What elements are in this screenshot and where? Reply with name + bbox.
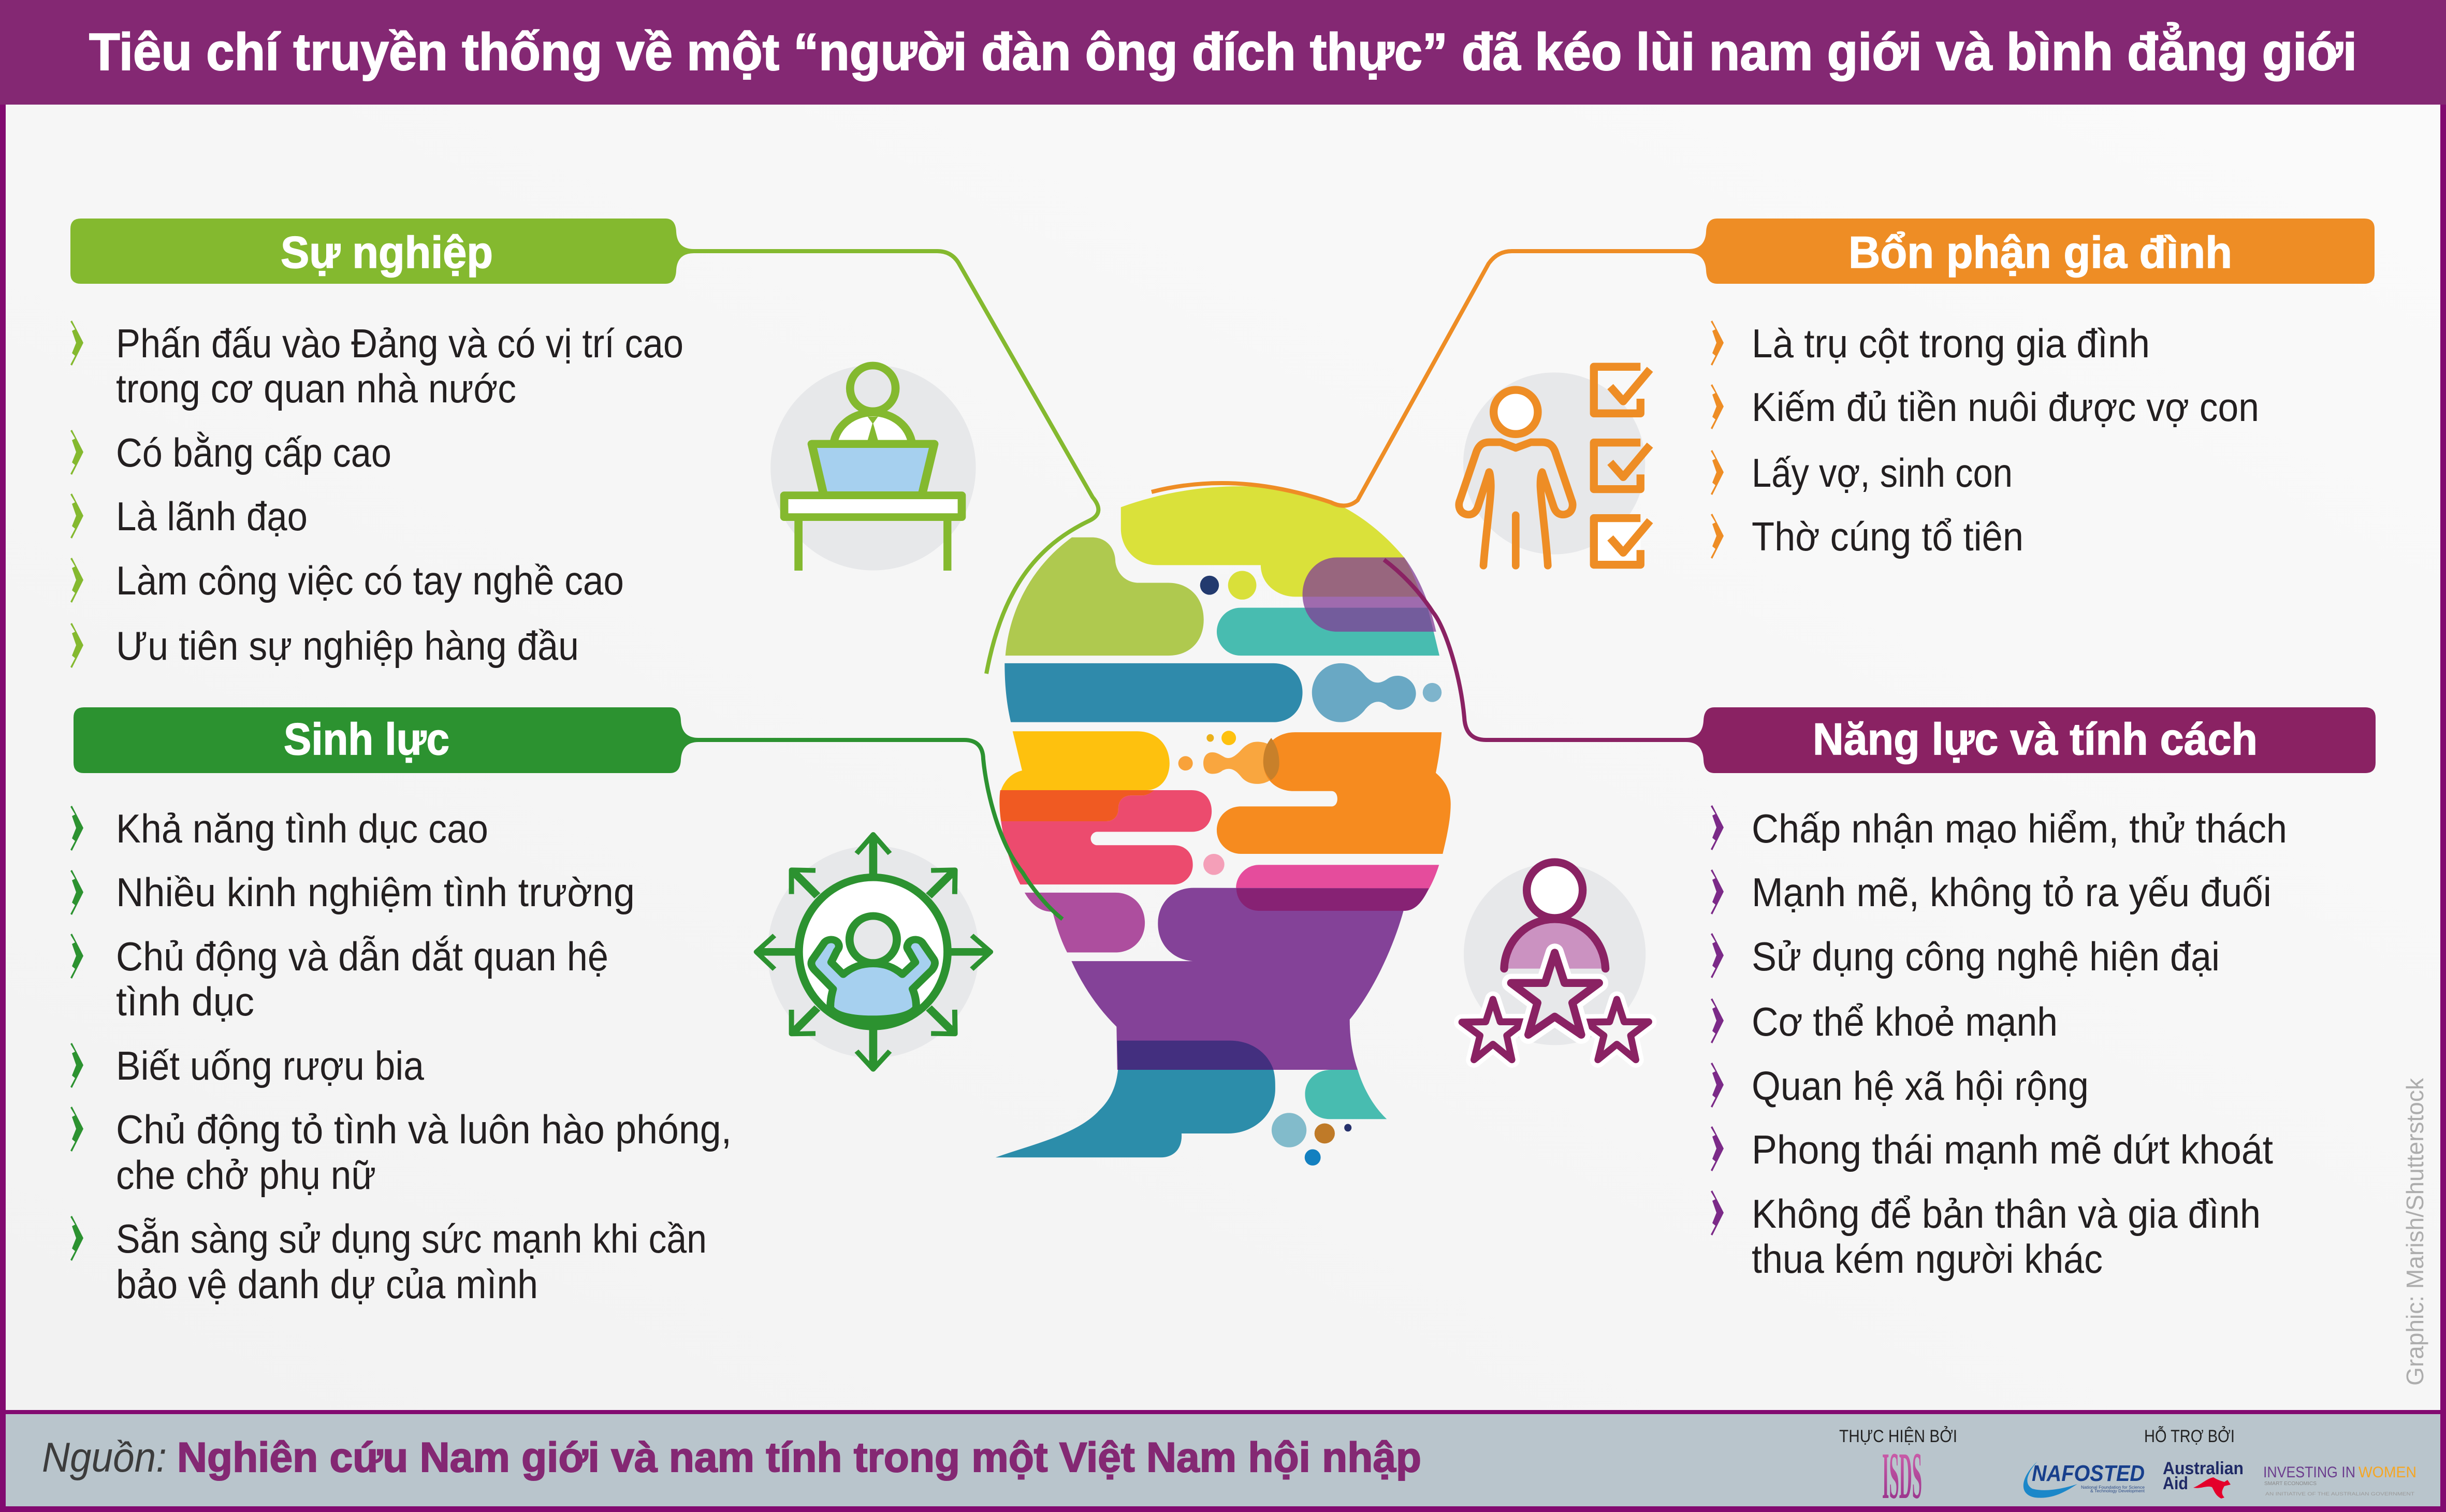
logo: NAFOSTED: HỖ TRỢ BỞI (2144, 1427, 2235, 1446)
panel: vitality list: Biết uống rượu bia (116, 1043, 425, 1088)
panel: vitality list: Khả năng tình dục cao (116, 806, 488, 851)
logo: Investing in Women: SMART ECONOMICS (2264, 1481, 2317, 1487)
connector: family duty (1152, 251, 1707, 506)
logo: Australian Aid: Australian (2163, 1459, 2244, 1478)
icon: person at desk with laptop (770, 365, 976, 571)
icon: person with checklist (1459, 367, 1650, 565)
source line: Nghiên cứu Nam giới và nam tính trong một Việt Nam hội nhập (177, 1434, 1421, 1481)
head band: orange (1217, 732, 1451, 854)
image credit: Graphic: Marish/Shutterstock (2401, 1078, 2428, 1386)
panel: ability and character list: thua kém người khác (1752, 1236, 2103, 1282)
head band: lower teal (1305, 1070, 1387, 1119)
panel: vitality list: Chủ động tỏ tình và luôn hào phóng, (116, 1107, 732, 1152)
overlap dark indigo (1117, 1041, 1273, 1070)
panel: family duty list (1711, 321, 2259, 559)
head band: neck blue (996, 1070, 1275, 1157)
panel: family duty list: Là trụ cột trong gia đình (1752, 321, 2150, 366)
panel: ability and character heading: Năng lực và tính cách (1813, 715, 2258, 764)
icon: person with stars (1462, 862, 1649, 1060)
logo: NAFOSTED (2023, 1427, 2235, 1498)
panel: ability and character list: Cơ thể khoẻ mạnh (1752, 999, 2058, 1044)
panel: ability and character list: Quan hệ xã hội rộng (1752, 1063, 2089, 1109)
logo: ISDS: THỰC HIỆN BỞI (1839, 1427, 1957, 1446)
panel: career list: Làm công việc có tay nghề cao (116, 558, 624, 603)
head band: magenta (1236, 865, 1439, 911)
connector: ability and character (1384, 560, 1704, 740)
overlap lens (1263, 738, 1279, 780)
logo: ISDS: ISDS (1882, 1439, 1922, 1512)
panel: vitality list: che chở phụ nữ (116, 1152, 376, 1198)
blob: light blue (1312, 663, 1416, 722)
panel: family duty list: Thờ cúng tổ tiên (1752, 514, 2023, 559)
panel: ability and character list: Sử dụng công nghệ hiện đại (1752, 934, 2220, 979)
logo: Investing in Women: WOMEN (2358, 1464, 2416, 1481)
panel: family duty heading: Bổn phận gia đình (1848, 228, 2232, 278)
panel: career heading: Sự nghiệp (281, 228, 493, 278)
logo: ISDS (1839, 1427, 1957, 1512)
icon: person with radiating arrows (756, 835, 991, 1069)
head band: yellow (1001, 731, 1170, 790)
logo: Investing in Women: INVESTING IN (2263, 1464, 2355, 1481)
panel: ability and character list: Phong thái mạnh mẽ dứt khoát (1752, 1127, 2273, 1172)
head band: purple main (1071, 888, 1428, 1070)
panel: vitality list (70, 806, 732, 1307)
connector: vitality (680, 740, 1062, 919)
logo: Australian Aid: Aid (2163, 1474, 2188, 1493)
head band: red-orange overlap (999, 790, 1154, 821)
panel: family duty heading (1688, 219, 2375, 284)
panel: ability and character heading (1686, 707, 2376, 773)
logo: Australian Aid (2163, 1459, 2244, 1499)
panel: family duty list: Kiếm đủ tiền nuôi được vợ con (1752, 384, 2259, 430)
panel: ability and character list: Không để bản thân và gia đình (1752, 1191, 2261, 1237)
panel: vitality heading (74, 707, 698, 773)
connector: career (676, 251, 1098, 674)
panel: family duty list: Lấy vợ, sinh con (1752, 450, 2013, 496)
panel: career list: trong cơ quan nhà nước (116, 366, 516, 411)
panel: career list: Ưu tiên sự nghiệp hàng đầu (116, 623, 579, 668)
logo: Investing in Women (2263, 1464, 2416, 1496)
blob: light orange (1203, 742, 1279, 784)
head band: teal (1217, 608, 1439, 656)
head band: yellow-green top (1121, 486, 1422, 597)
title band: Tiêu chí truyền thống về một “người đàn ông đích thực” đã kéo lùi nam giới và bình đẳng giới (89, 23, 2357, 81)
panel: vitality list: Nhiều kinh nghiệm tình trường (116, 869, 635, 915)
source line: Nguồn: (42, 1434, 167, 1481)
head band: olive green (1006, 537, 1204, 656)
panel: ability and character list: Chấp nhận mạo hiểm, thử thách (1752, 806, 2287, 851)
logo: NAFOSTED: & Technology Development (2090, 1488, 2145, 1493)
dots: middle (1178, 731, 1236, 875)
head band: purple overlay (1303, 558, 1436, 632)
head band: violet (1025, 893, 1145, 952)
panel: ability and character list: Mạnh mẽ, không tỏ ra yếu đuối (1752, 869, 2272, 915)
panel: career list (70, 321, 683, 668)
panel: vitality list: bảo vệ danh dự của mình (116, 1261, 538, 1307)
head band: blue (1004, 663, 1303, 722)
panel: career list: Có bằng cấp cao (116, 430, 391, 475)
panel: vitality heading: Sinh lực (284, 715, 449, 764)
head band: pink (1001, 790, 1212, 884)
logo: Investing in Women: AN INITIATIVE OF THE AUSTRALIAN GOVERNMENT (2265, 1491, 2415, 1496)
dots: lower (1272, 1113, 1351, 1166)
panel: career heading (70, 219, 694, 284)
logo: NAFOSTED: NAFOSTED (2032, 1461, 2145, 1486)
overlap dark magenta (1236, 889, 1429, 911)
logo: NAFOSTED: National Foundation for Science (2081, 1485, 2145, 1490)
footer band (0, 1410, 2446, 1512)
panel: vitality list: Chủ động và dẫn dắt quan hệ (116, 934, 608, 979)
panel: ability and character list (1711, 805, 2287, 1282)
panel: career list: Là lãnh đạo (116, 493, 308, 539)
panel: career list: Phấn đấu vào Đảng và có vị trí cao (116, 321, 683, 366)
title band (0, 0, 2446, 105)
central head illustration (996, 486, 1451, 1166)
dots: upper (1200, 571, 1442, 702)
panel: vitality list: Sẵn sàng sử dụng sức mạnh khi cần (116, 1216, 707, 1261)
panel: vitality list: tình dục (116, 979, 254, 1024)
